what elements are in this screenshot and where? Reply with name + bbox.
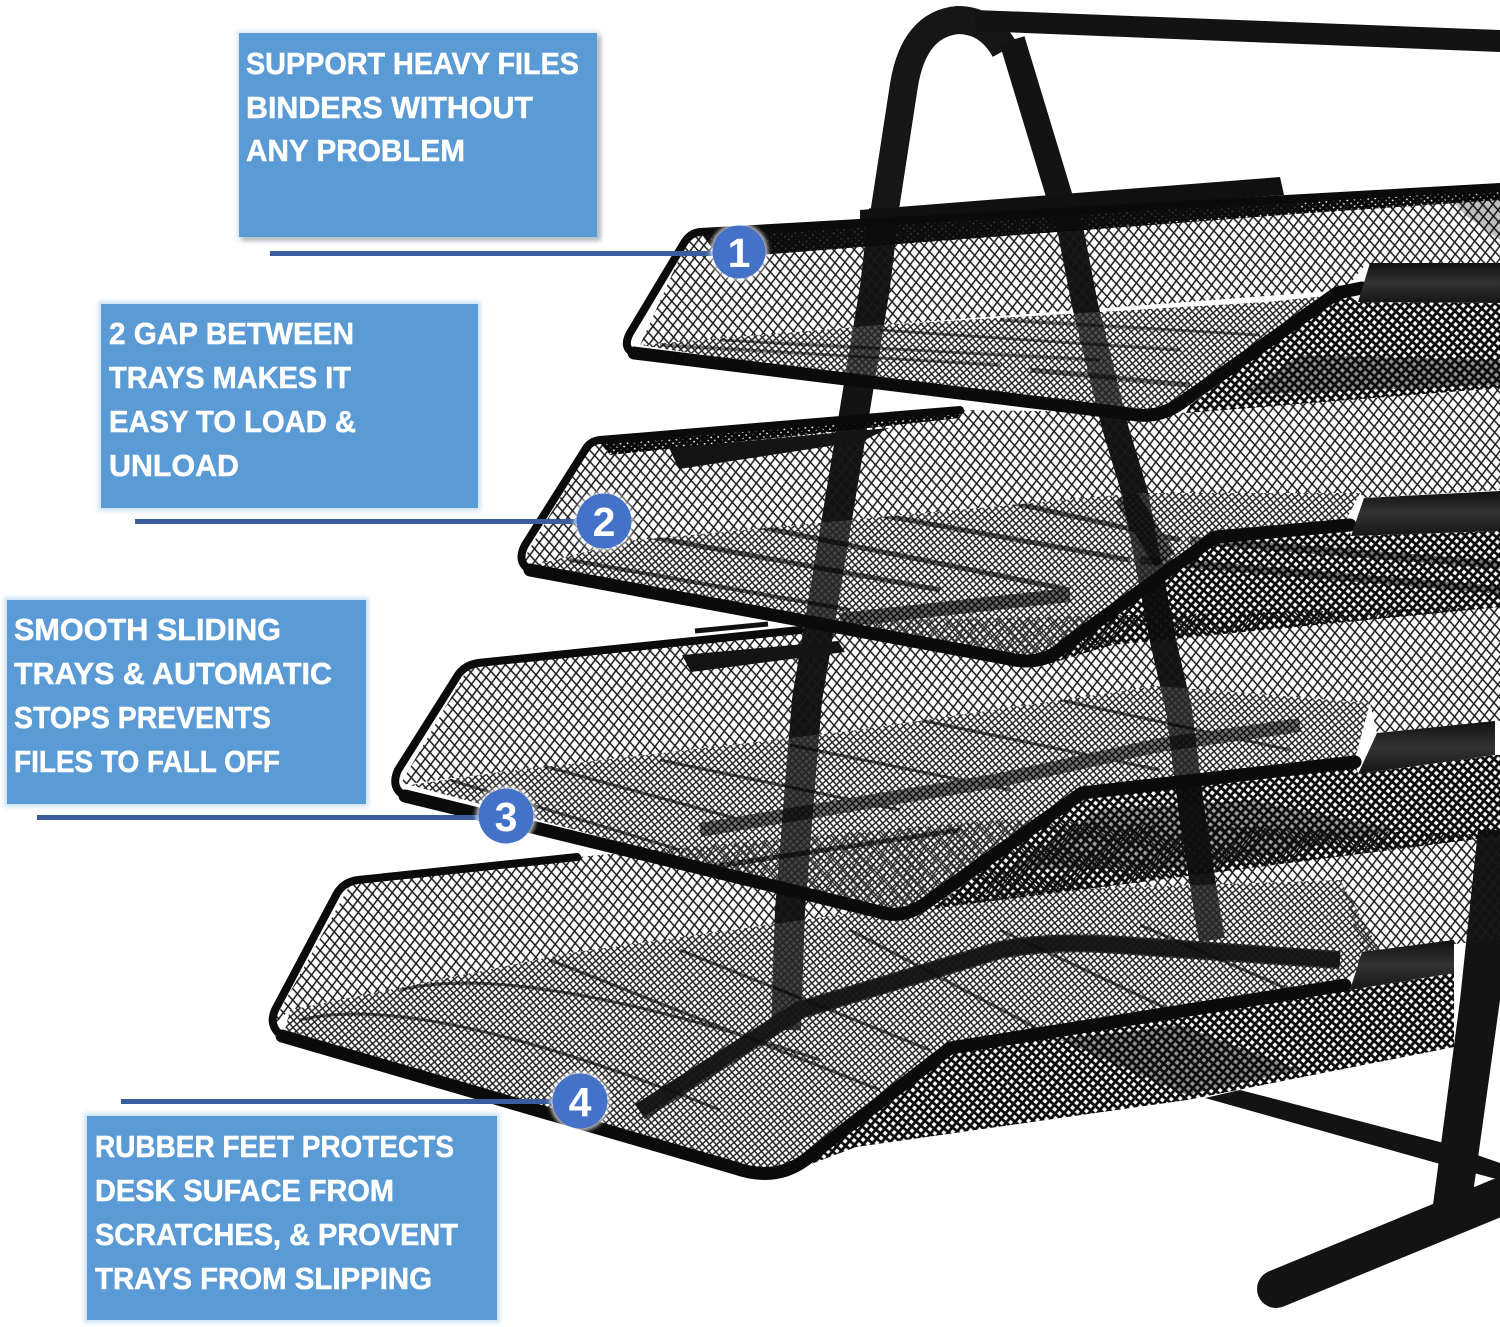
callout 4: RUBBER FEET PROTECTS (95, 1129, 454, 1164)
callout 4: SCRATCHES, & PROVENT (95, 1217, 458, 1252)
callout 1 (236, 30, 600, 240)
callout 1: BINDERS WITHOUT (246, 90, 533, 125)
callout 3 (4, 597, 369, 807)
callout 3: TRAYS & AUTOMATIC (14, 656, 332, 691)
number badge 4 (550, 1071, 610, 1131)
callout 1: SUPPORT HEAVY FILES (246, 46, 579, 81)
tray 3 (395, 607, 1500, 918)
leader line 4 (121, 1099, 556, 1104)
organizer base: rear rod, legs and foot (1205, 830, 1500, 1289)
number badge 1 (710, 223, 768, 281)
callout 2: TRAYS MAKES IT (109, 360, 351, 395)
callout 3: STOPS PREVENTS (14, 700, 271, 735)
callout 4: TRAYS FROM SLIPPING (95, 1261, 432, 1296)
callout 3: SMOOTH SLIDING (14, 612, 281, 647)
callout 3: FILES TO FALL OFF (14, 744, 280, 779)
callout 4 (84, 1113, 500, 1323)
number badge 4: 4 (569, 1079, 592, 1125)
callout 2 (98, 301, 481, 511)
callout 4: DESK SUFACE FROM (95, 1173, 394, 1208)
number badge 1: 1 (728, 230, 750, 276)
tray 4 (270, 820, 1500, 1173)
callout 2: UNLOAD (109, 448, 239, 483)
leader line 1 (270, 251, 715, 256)
number badge 3 (476, 786, 536, 846)
leader line 2 (135, 519, 580, 524)
callout 1: ANY PROBLEM (246, 133, 465, 168)
number badge 3: 3 (495, 794, 517, 840)
number badge 2 (574, 491, 634, 551)
organizer frame: arch and legs (640, 10, 1500, 1110)
number badge 2: 2 (593, 499, 615, 545)
callout 2: EASY TO LOAD & (109, 404, 356, 439)
tray 2 (520, 388, 1500, 665)
tray 1 (627, 177, 1500, 418)
callout 2: 2 GAP BETWEEN (109, 316, 354, 351)
leader line 3 (37, 815, 482, 820)
